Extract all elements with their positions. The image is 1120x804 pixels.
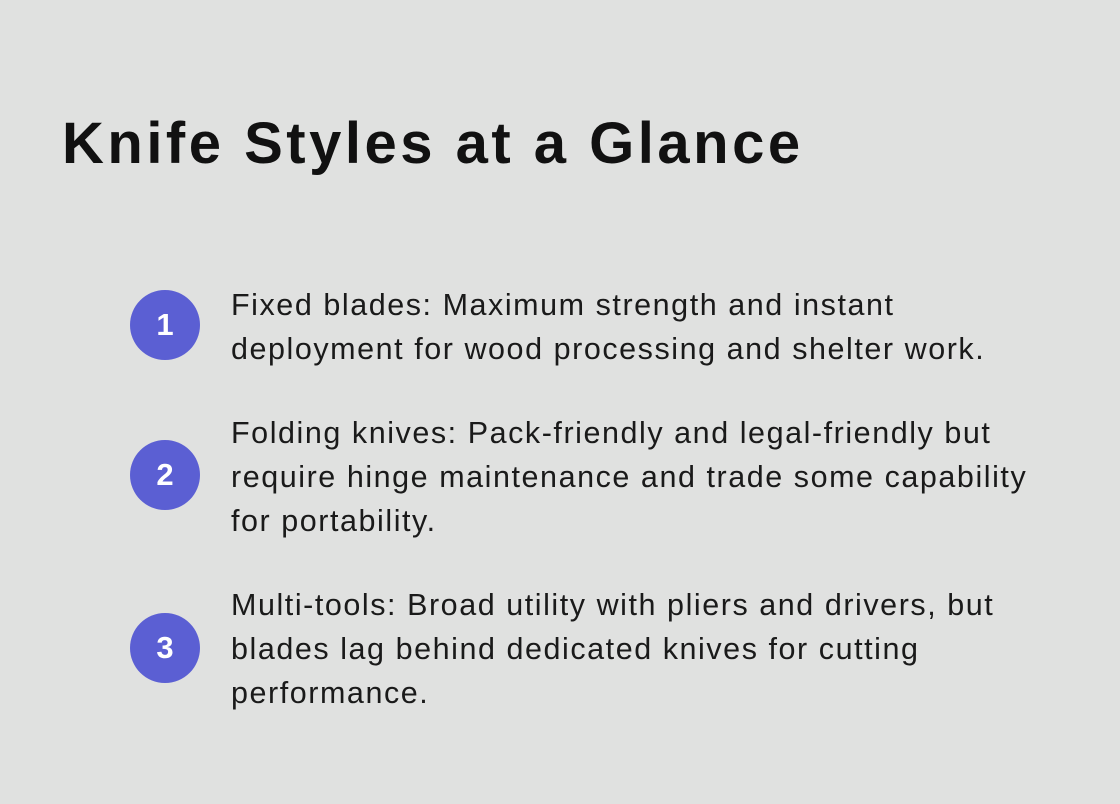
item 2	[130, 416, 1027, 538]
text 2	[231, 416, 1027, 538]
text 2: for portability.	[231, 504, 437, 538]
text 3: performance.	[231, 676, 429, 710]
icon: number 1: 1	[156, 307, 174, 342]
text 3	[231, 588, 994, 710]
item 1	[130, 288, 985, 366]
text 3: Multi-tools: Broad utility with pliers and drivers, but	[231, 588, 994, 622]
text 2: require hinge maintenance and trade some capability	[231, 460, 1027, 494]
text 2: Folding knives: Pack-friendly and legal-friendly but	[231, 416, 991, 450]
text 1: Fixed blades: Maximum strength and instant	[231, 288, 895, 322]
icon: number 3	[130, 613, 200, 683]
icon: number 2: 2	[156, 457, 174, 492]
icon: number 2	[130, 440, 200, 510]
title: Knife Styles at a Glance	[62, 111, 804, 176]
icon: number 1	[130, 290, 200, 360]
text 3: blades lag behind dedicated knives for cutting	[231, 632, 920, 666]
icon: number 3: 3	[156, 630, 174, 665]
text 1: deployment for wood processing and shelter work.	[231, 332, 985, 366]
text 1	[231, 288, 985, 366]
item 3	[130, 588, 994, 710]
